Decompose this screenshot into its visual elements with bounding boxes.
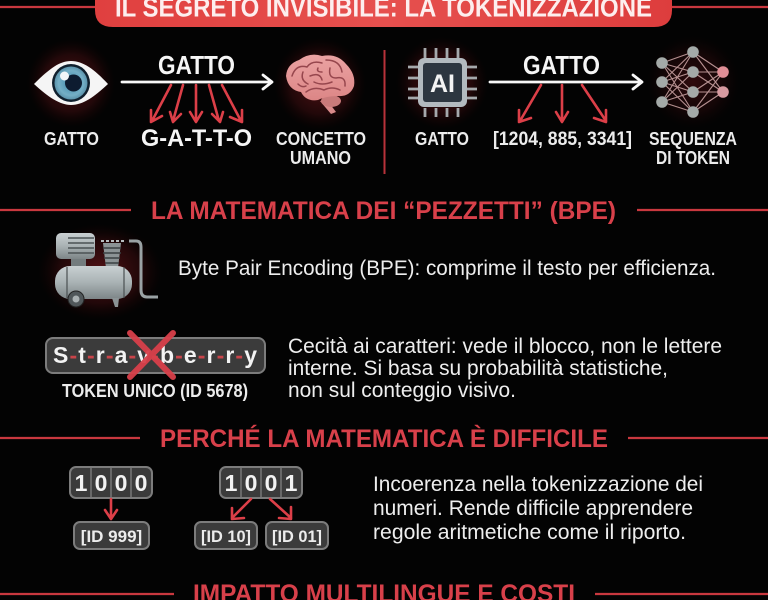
diagram: number 1000: 0 — [135, 470, 147, 496]
arrow: white AI — [490, 75, 642, 89]
arrows: red letter split — [151, 85, 242, 122]
section heading: matematica: PERCHÉ LA MATEMATICA È DIFFICILE — [160, 424, 608, 453]
diagram: number 1000: [ID 999] — [81, 527, 142, 546]
label: token unico: TOKEN UNICO (ID 5678) — [62, 380, 248, 401]
icon: AI chip: AI — [430, 70, 455, 98]
icon: red cross — [130, 333, 173, 377]
label: concetto umano: UMANO — [290, 147, 351, 168]
panel: human reading — [27, 38, 366, 168]
label: concetto umano — [276, 128, 366, 168]
text: incoerenza: regole aritmetiche come il riporto. — [373, 521, 686, 544]
panel: AI reading — [396, 36, 739, 168]
text: incoerenza: Incoerenza nella tokenizzazione dei — [373, 473, 703, 496]
label: concetto umano: CONCETTO — [276, 128, 366, 149]
text: byte pair encoding: Byte Pair Encoding (BPE): comprime il testo per efficienza. — [178, 257, 716, 280]
text: cecità ai caratteri: non sul conteggio visivo. — [288, 379, 516, 402]
text: cecità ai caratteri: interne. Si basa su probabilità statistiche, — [288, 357, 668, 380]
arrows: red token split — [519, 85, 606, 122]
label: sequenza di token: DI TOKEN — [656, 147, 730, 168]
text: incoerenza: numeri. Rende difficile apprendere — [373, 497, 693, 520]
vertical divider — [384, 50, 386, 174]
diagram: number 1001: 1 — [225, 470, 238, 496]
label: sequenza di token: SEQUENZA — [649, 128, 737, 149]
label: letters: G-A-T-T-O — [141, 125, 252, 152]
text: incoerenza — [373, 473, 703, 544]
heading: GATTO AI: GATTO — [523, 50, 600, 80]
label: sequenza di token — [649, 128, 737, 168]
token box: strawberry — [46, 333, 265, 377]
icon: brain — [274, 38, 366, 130]
label: GATTO under chip: GATTO — [415, 128, 469, 149]
icon: eye — [27, 39, 115, 127]
text: cecità ai caratteri — [288, 335, 722, 402]
icon: neural network — [647, 36, 739, 128]
text: cecità ai caratteri: Cecità ai caratteri: vede il blocco, non le lettere — [288, 335, 722, 358]
diagram: number 1000 — [70, 467, 152, 549]
diagram: number 1000: 0 — [95, 470, 107, 496]
section heading: BPE: LA MATEMATICA DEI “PEZZETTI” (BPE) — [151, 197, 616, 225]
diagram: number 1001: [ID 01] — [272, 527, 322, 546]
diagram: number 1001: 1 — [285, 470, 298, 496]
arrow: white human — [122, 75, 272, 89]
label: token ids: [1204, 885, 3341] — [493, 128, 632, 150]
label: GATTO under eye: GATTO — [44, 128, 99, 149]
diagram: number 1001: 0 — [265, 470, 277, 496]
diagram: number 1001: 0 — [245, 470, 257, 496]
heading: GATTO human: GATTO — [158, 50, 235, 80]
token box: strawberry: S-t-r-a-v-b-e-r-r-y — [53, 342, 257, 368]
diagram: number 1001: [ID 10] — [201, 527, 251, 546]
title banner — [0, 0, 768, 27]
diagram: number 1000: 1 — [75, 470, 88, 496]
icon: air compressor — [38, 224, 162, 320]
icon: AI chip — [396, 37, 488, 129]
diagram: number 1000: 0 — [115, 470, 127, 496]
diagram: number 1001 — [195, 467, 328, 549]
